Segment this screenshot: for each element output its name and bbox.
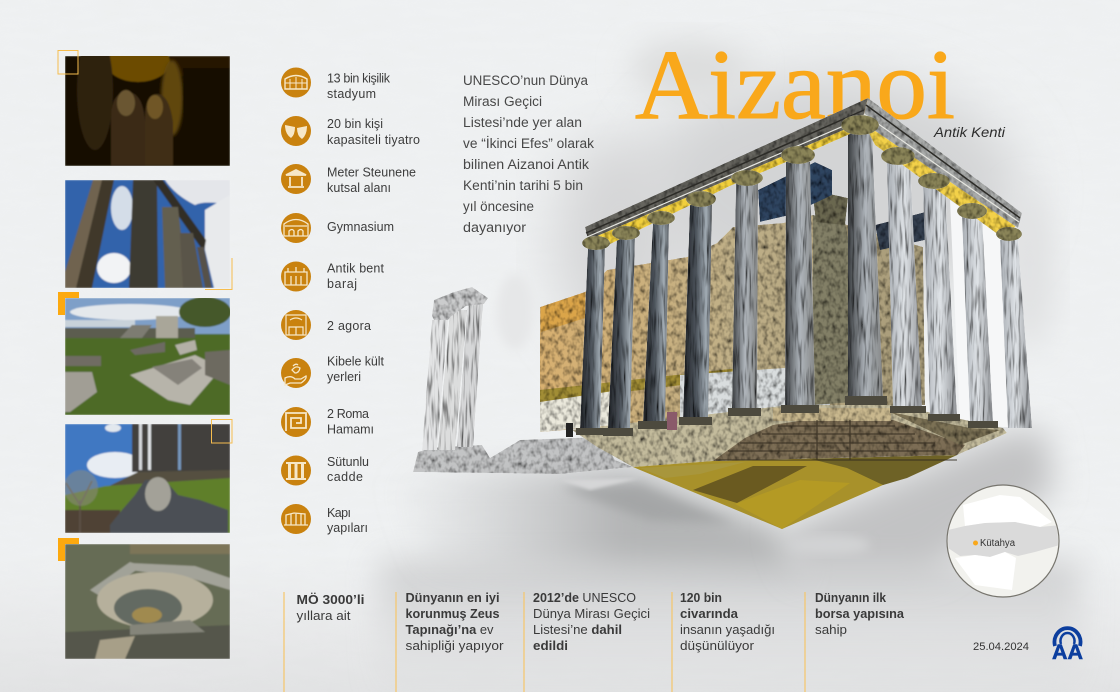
item: theatre xyxy=(281,116,420,147)
intro paragraph: Mirası Geçici xyxy=(463,94,542,109)
item: gymnasium xyxy=(281,213,394,243)
accent frame: photo 2 xyxy=(205,258,232,290)
intro paragraph: Listesi’nde yer alan xyxy=(463,115,582,130)
fact: population: 120 bin xyxy=(680,590,722,605)
item: sanctuary: kutsal alanı xyxy=(327,181,391,195)
fact: stock exchange: borsa yapısına xyxy=(815,606,905,621)
photo 5: aerial of the stadium xyxy=(65,544,230,659)
item: sanctuary xyxy=(281,164,416,195)
column: 3 xyxy=(643,222,669,422)
fact: stock exchange: sahip xyxy=(815,622,847,637)
item: gate structures: yapıları xyxy=(327,521,368,535)
item: gymnasium: Gymnasium xyxy=(327,220,394,234)
intro paragraph: ve “İkinci Efes” olarak xyxy=(463,136,594,151)
item: dam: Antik bent xyxy=(327,262,385,276)
fact: population: düşünülüyor xyxy=(680,638,755,653)
temple of Zeus xyxy=(540,98,1032,529)
ghost columns sketch xyxy=(413,287,633,474)
fact: MÖ 3000: yıllara ait xyxy=(296,608,351,623)
item: Cybele cult: Kibele kült xyxy=(327,354,385,368)
item: stadium xyxy=(281,68,391,101)
location map xyxy=(947,485,1060,597)
item: colonnaded street: cadde xyxy=(327,470,363,484)
accent corner: photo 5 xyxy=(58,538,79,561)
item: colonnaded street xyxy=(281,455,369,486)
bottom facts xyxy=(284,590,905,692)
accent frame: photo 4 xyxy=(212,420,232,443)
map label: Kütahya xyxy=(980,538,1015,549)
fact: Zeus temple: Dünyanın en iyi xyxy=(406,590,500,605)
intro paragraph: dayanıyor xyxy=(463,220,527,235)
item: Cybele cult: yerleri xyxy=(327,370,361,384)
intro paragraph: Kenti’nin tarihi 5 bin xyxy=(463,178,583,193)
fact: UNESCO 2012: Dünya Mirası Geçici xyxy=(533,606,650,621)
fact: MÖ 3000 xyxy=(296,592,364,623)
date: 25.04.2024 xyxy=(973,641,1029,653)
fact: Zeus temple: korunmuş Zeus xyxy=(406,606,500,621)
item: agora xyxy=(281,310,371,340)
AA logo xyxy=(1052,628,1083,664)
entablature xyxy=(585,98,1022,240)
map marker xyxy=(973,540,978,546)
ground gray surroundings xyxy=(390,430,1055,572)
column: 5 xyxy=(732,182,758,408)
accent frame: photo 1 xyxy=(58,50,78,74)
steps shading xyxy=(716,420,957,460)
intro paragraph: bilinen Aizanoi Antik xyxy=(463,157,589,172)
item: stadium: stadyum xyxy=(327,87,376,101)
column: 6 xyxy=(785,162,815,405)
title: Aizanoi xyxy=(635,29,955,140)
fact: UNESCO 2012: edildi xyxy=(533,638,568,653)
intro paragraph xyxy=(463,73,594,235)
accent corner: photo 3 xyxy=(58,292,79,315)
column: 1 xyxy=(580,247,605,428)
fact: stock exchange xyxy=(815,590,905,637)
fact: population: insanın yaşadığı xyxy=(680,622,775,637)
fact: population xyxy=(680,590,775,653)
item: gate structures: Kapı xyxy=(327,506,351,520)
item: Roman baths: Hamamı xyxy=(327,422,374,436)
entablature moulding xyxy=(586,105,1020,233)
column: 2 xyxy=(608,237,635,428)
item: stadium: 13 bin kişilik xyxy=(327,72,391,86)
column: 4 xyxy=(683,203,712,418)
capitals xyxy=(582,115,1022,250)
feature list xyxy=(281,68,420,535)
fact: UNESCO 2012: 2012’de UNESCO xyxy=(533,590,636,605)
fact: UNESCO 2012 xyxy=(533,590,650,653)
fact: stock exchange: Dünyanın ilk xyxy=(815,590,887,605)
fact: MÖ 3000: MÖ 3000’li xyxy=(296,592,364,607)
visitors xyxy=(566,412,677,437)
column: 8 xyxy=(887,163,922,408)
photo 4: temple and Medusa head xyxy=(64,424,230,533)
column: 11 xyxy=(1000,240,1032,428)
temple platform and steps xyxy=(572,405,1007,467)
column bases xyxy=(576,396,998,436)
AA logo: AA xyxy=(1052,641,1083,664)
fact: UNESCO 2012: Listesi’ne dahil xyxy=(533,622,622,637)
item: theatre: kapasiteli tiyatro xyxy=(327,133,420,147)
item: gate structures xyxy=(281,504,368,535)
item: sanctuary: Meter Steunene xyxy=(327,166,416,180)
photo 2: columns against the sky xyxy=(65,180,230,288)
item: Roman baths: 2 Roma xyxy=(327,407,369,421)
white sky behind columns xyxy=(950,200,1024,428)
photo 1: relief figures xyxy=(65,56,230,166)
photo 3: field of ruins xyxy=(65,297,231,415)
intro paragraph: UNESCO’nun Dünya xyxy=(463,73,588,88)
column: 10 xyxy=(962,217,993,422)
column: 7 corner xyxy=(848,132,883,398)
golden soffit xyxy=(590,120,1016,248)
subtitle: Antik Kenti xyxy=(933,124,1006,140)
cella wall xyxy=(540,162,925,432)
fact: population: civarında xyxy=(680,606,739,621)
item: dam: baraj xyxy=(327,277,357,291)
photo column xyxy=(58,30,232,659)
column: 9 xyxy=(923,187,957,415)
item: Cybele cult xyxy=(281,354,385,388)
item: colonnaded street: Sütunlu xyxy=(327,455,369,469)
intro paragraph: yıl öncesine xyxy=(463,199,534,214)
fact: Zeus temple xyxy=(406,590,504,653)
item: Roman baths xyxy=(281,407,374,437)
item: dam xyxy=(281,262,385,292)
item: theatre: 20 bin kişi xyxy=(327,117,383,131)
item: agora: 2 agora xyxy=(327,319,371,333)
ground diamond xyxy=(633,455,957,529)
fact: Zeus temple: sahipliği yapıyor xyxy=(406,638,504,653)
fact: Zeus temple: Tapınağı’na ev xyxy=(406,622,494,637)
